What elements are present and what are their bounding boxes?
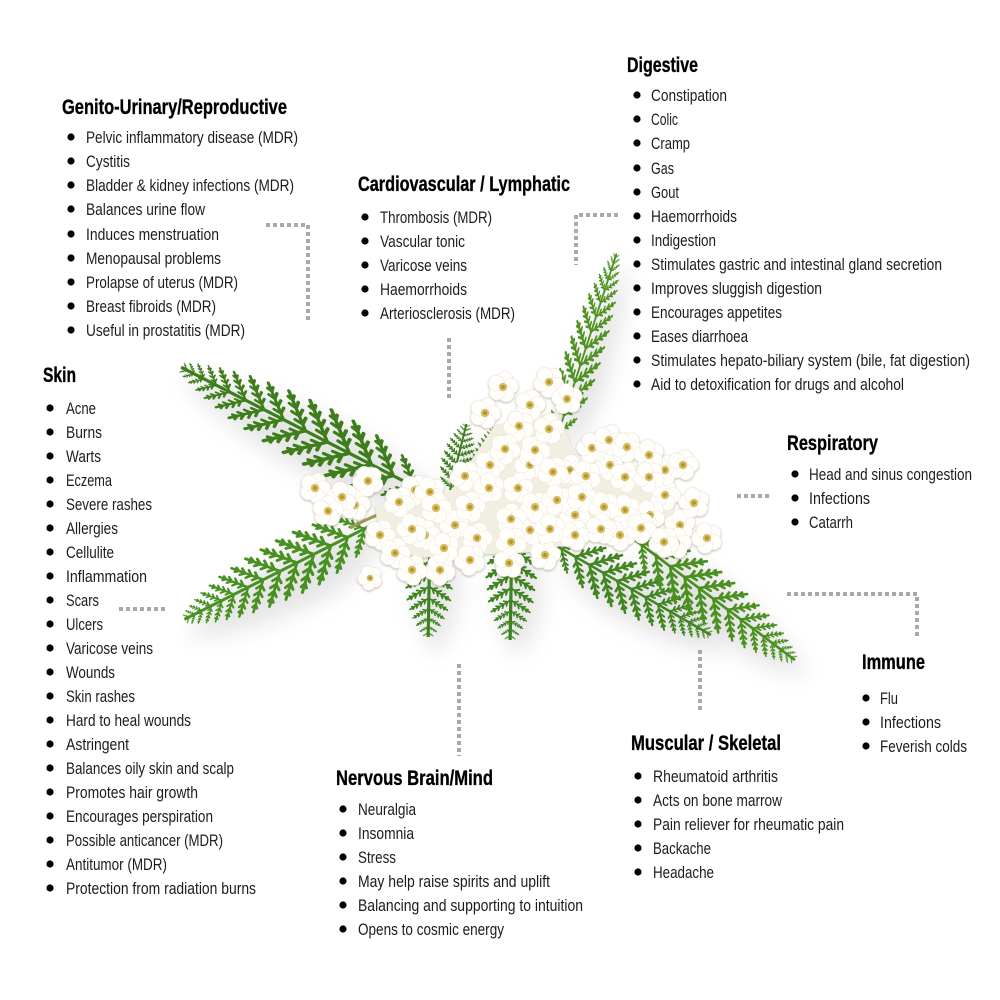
connector: respiratory bbox=[737, 494, 772, 498]
heading: Muscular / Skeletal bbox=[631, 732, 781, 755]
list: Catarrh bbox=[809, 513, 853, 532]
connector: nervous bbox=[457, 664, 461, 756]
list: Burns bbox=[66, 423, 102, 442]
list bbox=[46, 399, 256, 898]
list: Eczema bbox=[66, 471, 112, 490]
list: Possible anticancer (MDR) bbox=[66, 831, 223, 850]
list: Cellulite bbox=[66, 543, 114, 562]
list: Thrombosis (MDR) bbox=[380, 208, 492, 227]
list: Warts bbox=[66, 447, 101, 466]
green fern-like fronds bbox=[166, 247, 812, 683]
list: Balances oily skin and scalp bbox=[66, 759, 234, 778]
heading: Immune bbox=[862, 651, 925, 674]
list: Pelvic inflammatory disease (MDR) bbox=[86, 128, 298, 147]
list: Balancing and supporting to intuition bbox=[358, 896, 583, 915]
list: Useful in prostatitis (MDR) bbox=[86, 321, 245, 340]
heading: Nervous Brain/Mind bbox=[336, 767, 493, 790]
list: Infections bbox=[880, 713, 941, 732]
list: Pain reliever for rheumatic pain bbox=[653, 815, 844, 834]
list: Cystitis bbox=[86, 152, 130, 171]
list: Hard to heal wounds bbox=[66, 711, 191, 730]
panel: genito-urinary / reproductive bbox=[62, 96, 298, 340]
panel: nervous brain / mind bbox=[336, 767, 583, 939]
list: Backache bbox=[653, 839, 711, 858]
list: Bladder & kidney infections (MDR) bbox=[86, 176, 294, 195]
list: Balances urine flow bbox=[86, 200, 206, 219]
panel: cardiovascular / lymphatic bbox=[358, 173, 570, 323]
panel: immune bbox=[862, 651, 967, 756]
list bbox=[791, 465, 972, 532]
list: Neuralgia bbox=[358, 800, 416, 819]
list bbox=[67, 128, 298, 340]
panel: muscular / skeletal bbox=[631, 732, 844, 882]
list: Flu bbox=[880, 689, 898, 708]
heading: Digestive bbox=[627, 54, 698, 77]
list bbox=[339, 800, 583, 939]
list: Constipation bbox=[651, 86, 727, 105]
list: Antitumor (MDR) bbox=[66, 855, 167, 874]
list: Haemorrhoids bbox=[651, 207, 737, 226]
heading: Respiratory bbox=[787, 432, 878, 455]
list: Cramp bbox=[651, 134, 690, 153]
connector: immune bbox=[787, 594, 917, 636]
panel: digestive bbox=[627, 54, 970, 394]
list: Gout bbox=[651, 183, 679, 202]
list: Arteriosclerosis (MDR) bbox=[380, 304, 515, 323]
list: Inflammation bbox=[66, 567, 147, 586]
list: Haemorrhoids bbox=[380, 280, 467, 299]
list: Aid to detoxification for drugs and alcohol bbox=[651, 375, 904, 394]
list bbox=[862, 689, 967, 756]
list bbox=[634, 767, 844, 882]
list: Acts on bone marrow bbox=[653, 791, 783, 810]
list bbox=[633, 86, 970, 394]
list: Severe rashes bbox=[66, 495, 152, 514]
list: Prolapse of uterus (MDR) bbox=[86, 273, 238, 292]
list: Scars bbox=[66, 591, 99, 610]
panel: respiratory bbox=[787, 432, 972, 532]
list: Varicose veins bbox=[380, 256, 467, 275]
list: Protection from radiation burns bbox=[66, 879, 256, 898]
connector: skin bbox=[119, 607, 168, 611]
list: Skin rashes bbox=[66, 687, 135, 706]
list: Infections bbox=[809, 489, 870, 508]
list: Insomnia bbox=[358, 824, 414, 843]
list: Allergies bbox=[66, 519, 118, 538]
list: Menopausal problems bbox=[86, 249, 221, 268]
list: Astringent bbox=[66, 735, 129, 754]
list: Encourages perspiration bbox=[66, 807, 213, 826]
connector: muscular bbox=[698, 650, 702, 710]
list: Breast fibroids (MDR) bbox=[86, 297, 216, 316]
connector: cardiovascular bbox=[447, 338, 451, 398]
flower cluster bbox=[296, 360, 729, 595]
list: Rheumatoid arthritis bbox=[653, 767, 778, 786]
list: Varicose veins bbox=[66, 639, 153, 658]
illustration: yarrow plant with fronds and white flowers bbox=[166, 247, 812, 683]
list: Colic bbox=[651, 110, 678, 129]
list: Gas bbox=[651, 159, 674, 178]
list: Encourages appetites bbox=[651, 303, 782, 322]
list bbox=[361, 208, 515, 323]
list: Promotes hair growth bbox=[66, 783, 198, 802]
list: Eases diarrhoea bbox=[651, 327, 748, 346]
list: Wounds bbox=[66, 663, 115, 682]
connector: digestive bbox=[576, 215, 618, 265]
list: Vascular tonic bbox=[380, 232, 465, 251]
panel: skin bbox=[43, 364, 256, 898]
list: Stress bbox=[358, 848, 396, 867]
list: Stimulates gastric and intestinal gland secretion bbox=[651, 255, 942, 274]
list: Ulcers bbox=[66, 615, 103, 634]
list: Improves sluggish digestion bbox=[651, 279, 822, 298]
heading: Genito-Urinary/Reproductive bbox=[62, 96, 287, 119]
connector: genito-urinary bbox=[266, 225, 308, 322]
heading: Skin bbox=[43, 364, 76, 387]
list: Acne bbox=[66, 399, 96, 418]
list: May help raise spirits and uplift bbox=[358, 872, 550, 891]
heading: Cardiovascular / Lymphatic bbox=[358, 173, 570, 196]
list: Feverish colds bbox=[880, 737, 967, 756]
list: Indigestion bbox=[651, 231, 716, 250]
list: Induces menstruation bbox=[86, 225, 219, 244]
list: Opens to cosmic energy bbox=[358, 920, 504, 939]
list: Headache bbox=[653, 863, 714, 882]
